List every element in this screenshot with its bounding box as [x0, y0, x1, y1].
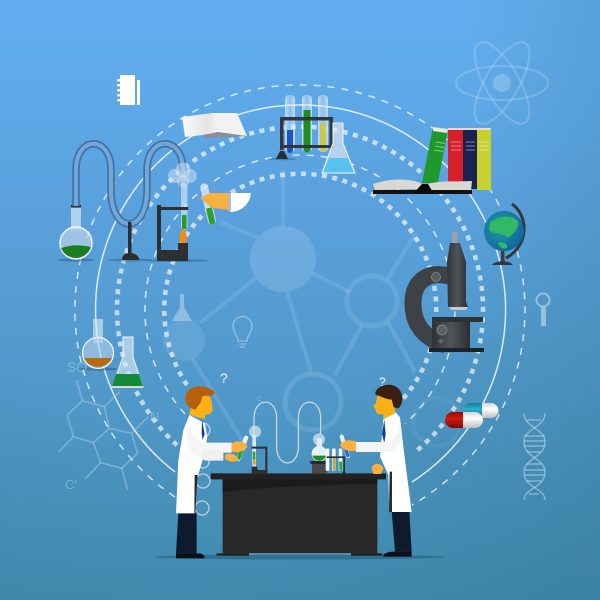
capsules — [445, 403, 498, 428]
question mark left: ? — [220, 370, 228, 386]
microscope — [413, 232, 484, 352]
open white book — [182, 113, 247, 138]
curved glass tube — [76, 144, 183, 224]
small hollow circles behind scientist — [195, 423, 210, 515]
icon: magnifier — [536, 294, 550, 326]
conical flask with blue liquid — [322, 123, 355, 173]
floor shadow — [155, 554, 445, 560]
globe — [484, 204, 524, 265]
table burner stand — [249, 426, 267, 473]
conical flask with green liquid — [112, 337, 143, 388]
faded chemical symbols: C — [257, 396, 262, 403]
faded chemical symbols: N — [150, 409, 159, 424]
table test tube rack — [326, 448, 346, 473]
stack of books — [422, 127, 491, 190]
left scientist — [176, 386, 249, 558]
faded hexagon molecule — [58, 380, 148, 490]
faded chemical symbols: SO — [67, 359, 87, 375]
icon: notebook — [117, 75, 140, 105]
table — [211, 473, 386, 556]
hand holding test tube — [199, 183, 251, 225]
faded chemical symbols: C' — [65, 477, 77, 492]
laboratory scene — [176, 385, 412, 558]
question mark right: ? — [379, 375, 386, 389]
open book under the stack — [373, 180, 472, 194]
round flask with green liquid — [57, 205, 95, 262]
tube support stand — [108, 222, 152, 262]
faded chemical symbols — [65, 359, 262, 492]
icon: atom — [456, 35, 548, 131]
right scientist — [339, 385, 412, 557]
test tube rack — [268, 95, 333, 160]
orbit rings — [75, 85, 525, 505]
faded light bulb icon — [233, 316, 252, 347]
faded small flask icon — [172, 294, 192, 321]
icon: DNA helix — [524, 413, 545, 500]
round flask with brown liquid — [78, 319, 118, 371]
table heater with flask — [310, 433, 329, 473]
table glass tube — [254, 402, 321, 463]
burner stand with test tube — [148, 162, 208, 262]
faded molecular network — [163, 170, 461, 446]
